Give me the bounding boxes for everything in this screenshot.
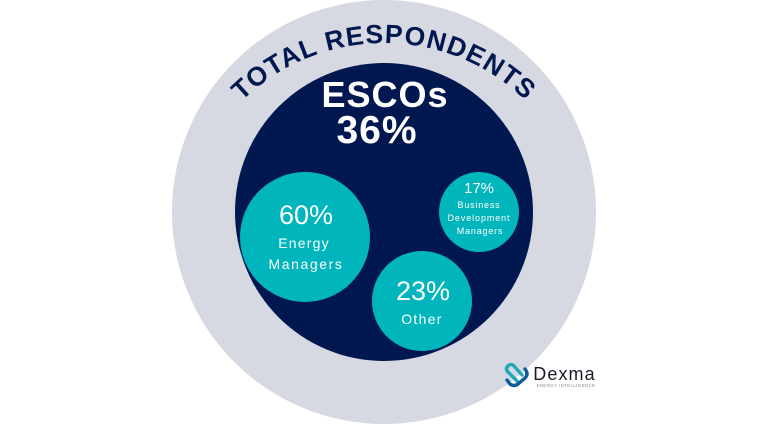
icon: Dexma mark — [506, 364, 527, 386]
bubble: business development managers: Business — [458, 200, 500, 210]
logo: Dexma — [506, 364, 596, 388]
curved heading: TOTAL RESPONDENTS: TOTAL RESPONDENTS — [230, 24, 534, 98]
outer circle: total respondents — [172, 0, 596, 424]
bubble: business development managers: 17% — [464, 180, 494, 197]
bubble: energy managers: 60% — [279, 200, 333, 230]
logo wordmark: Dexma — [533, 364, 596, 384]
bubble: energy managers — [240, 172, 370, 302]
inner circle: ESCOs — [235, 63, 533, 361]
ESCOs heading: ESCOs — [321, 74, 449, 115]
bubble: other: Other — [401, 311, 443, 327]
ESCOs percentage: 36% — [336, 109, 418, 152]
bubble: energy managers: Managers — [268, 256, 344, 272]
bubble: other — [372, 251, 472, 351]
bubble: business development managers: Managers — [457, 226, 503, 236]
logo tagline: ENERGY INTELLIGENCE — [537, 383, 595, 388]
bubble: business development managers — [439, 172, 519, 252]
bubble: other: 23% — [396, 276, 450, 306]
bubble: energy managers: Energy — [278, 235, 330, 251]
bubble: business development managers: Development — [448, 213, 510, 223]
